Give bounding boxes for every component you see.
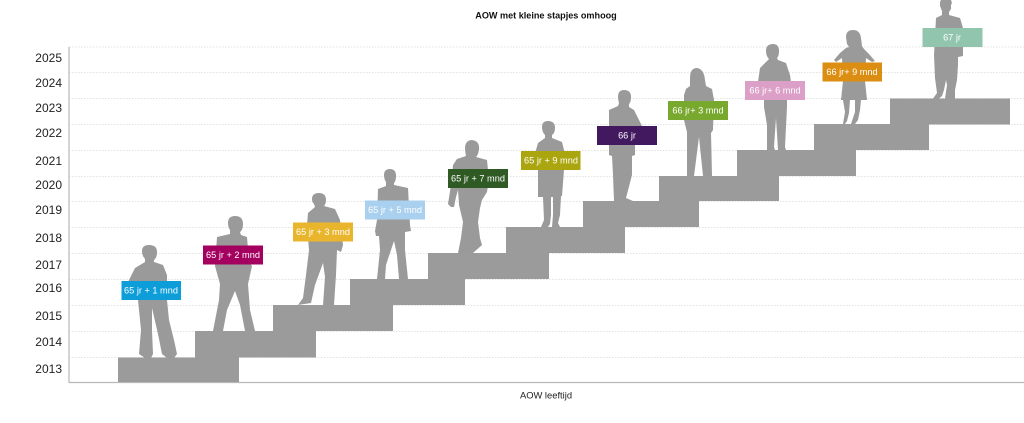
staircase <box>118 98 1010 382</box>
figure 8 <box>684 68 714 176</box>
axis: years: 2020 <box>35 178 62 192</box>
figure 2 <box>213 216 255 331</box>
label: 65 jr + 1 mnd <box>122 281 181 300</box>
axis: years: 2018 <box>35 231 62 245</box>
axis: years: 2014 <box>35 335 62 349</box>
label: 65 jr + 9 mnd <box>521 151 580 170</box>
label: 66 jr+ 6 mnd: 66 jr+ 6 mnd <box>749 86 801 96</box>
axis: years: 2022 <box>35 126 62 140</box>
title: AOW met kleine stapjes omhoog <box>475 10 617 20</box>
label: 67 jr: 67 jr <box>943 32 961 42</box>
chart axes <box>69 47 1024 382</box>
figure 5 <box>448 140 489 253</box>
label: 65 jr + 5 mnd <box>365 200 425 220</box>
label: 65 jr + 7 mnd <box>448 169 508 188</box>
label: 66 jr+ 3 mnd <box>668 101 728 120</box>
label: 66 jr+ 9 mnd <box>822 62 882 82</box>
label: 67 jr <box>922 28 982 47</box>
label: 65 jr + 5 mnd: 65 jr + 5 mnd <box>368 205 422 215</box>
label: 65 jr + 7 mnd: 65 jr + 7 mnd <box>451 174 505 184</box>
axis: years: 2024 <box>35 76 62 90</box>
axis: years: 2013 <box>35 362 62 376</box>
figure 7 <box>609 90 642 201</box>
label: 66 jr <box>597 126 657 145</box>
figure 6 <box>536 121 564 227</box>
axis: years: 2025 <box>35 51 62 65</box>
label: 66 jr+ 3 mnd: 66 jr+ 3 mnd <box>672 106 724 116</box>
label: 66 jr: 66 jr <box>618 130 636 140</box>
figure 11 <box>933 0 963 98</box>
axis: years: 2015 <box>35 309 62 323</box>
axis: years <box>35 51 62 376</box>
axis: years: 2016 <box>35 281 62 295</box>
label: 65 jr + 2 mnd: 65 jr + 2 mnd <box>206 250 260 260</box>
axis: years: 2021 <box>35 154 62 168</box>
label: 65 jr + 3 mnd <box>293 222 353 242</box>
label: 66 jr+ 6 mnd <box>745 81 805 100</box>
axis: years: 2017 <box>35 258 62 272</box>
figure 1 <box>128 245 177 358</box>
figure 3 <box>298 193 343 305</box>
figure 4 <box>375 169 411 279</box>
label: 65 jr + 1 mnd: 65 jr + 1 mnd <box>124 286 178 296</box>
label: 65 jr + 2 mnd <box>203 246 263 264</box>
axis: years: 2023 <box>35 101 62 115</box>
figure 9 <box>758 44 791 150</box>
x-axis title: AOW leeftijd <box>520 390 572 400</box>
label: 65 jr + 9 mnd: 65 jr + 9 mnd <box>524 156 578 166</box>
axis: years: 2019 <box>35 203 62 217</box>
figure 10 <box>834 30 875 124</box>
label: 66 jr+ 9 mnd: 66 jr+ 9 mnd <box>826 67 878 77</box>
label: 65 jr + 3 mnd: 65 jr + 3 mnd <box>296 227 350 237</box>
